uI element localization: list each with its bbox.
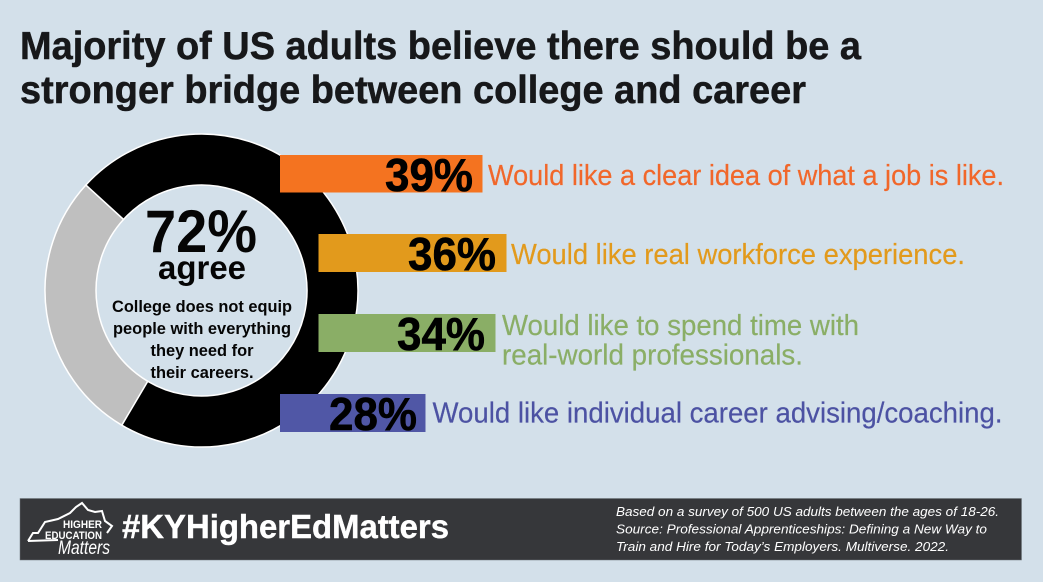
hashtag: #KYHigherEdMatters [122, 508, 449, 545]
donut centre text: agree [158, 249, 246, 286]
icon: Kentucky outline logo: HIGHER [63, 519, 102, 531]
donut centre text [112, 198, 292, 382]
source note [616, 504, 999, 554]
bar: 36% real workforce experience: 36% [408, 228, 496, 280]
donut segment: remaining share [45, 185, 148, 425]
bar: 39% clear idea of a job: Would like a clear idea of what a job is like. [488, 160, 1004, 192]
donut centre text: College does not equip [112, 297, 292, 316]
source note: Based on a survey of 500 US adults between the ages of 18-26. [616, 504, 999, 519]
bar: 34% time with real-world professionals: real-world professionals. [502, 340, 803, 372]
bar: 36% real workforce experience: Would like real workforce experience. [511, 239, 965, 271]
bar: 39% clear idea of a job [280, 149, 1004, 201]
bar: 28% career advising [280, 388, 1002, 440]
donut centre text: people with everything [113, 319, 291, 338]
bar: 28% career advising: 28% [329, 388, 417, 440]
donut segment: agree share [86, 134, 358, 447]
donut centre text: 72% [145, 198, 257, 265]
bar: 34% time with real-world professionals: Would like to spend time with [502, 310, 859, 342]
title: stronger bridge between college and career [20, 69, 806, 112]
donut chart: 72% agree [45, 134, 358, 447]
bar: 36% real workforce experience [318, 228, 965, 280]
title [20, 25, 861, 112]
source note: Source: Professional Apprenticeships: Defining a New Way to [616, 522, 987, 536]
bar: 39% clear idea of a job: 39% [385, 149, 473, 201]
donut centre text: they need for [150, 341, 254, 360]
bar: 28% career advising: Would like individual career advising/coaching. [432, 398, 1002, 430]
icon: Kentucky outline logo: Matters [58, 538, 110, 559]
bar: 34% time with real-world professionals [318, 308, 859, 372]
icon: Kentucky outline logo [28, 503, 112, 559]
bar: 34% time with real-world professionals: 34% [397, 308, 485, 360]
donut centre text: their careers. [150, 363, 254, 382]
title: Majority of US adults believe there should be a [20, 25, 861, 68]
footer band [20, 498, 1022, 560]
source note: Train and Hire for Today’s Employers. Multiverse. 2022. [616, 539, 949, 554]
icon: Kentucky outline logo: EDUCATION [45, 530, 102, 542]
